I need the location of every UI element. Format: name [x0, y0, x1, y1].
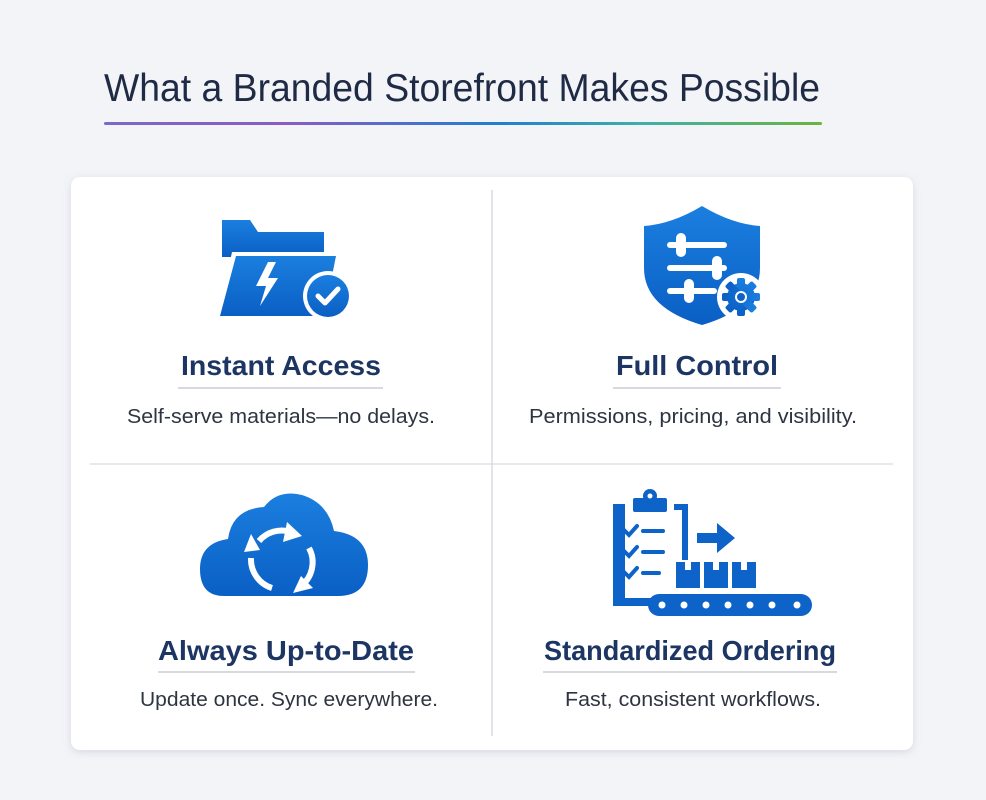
panel: full control: Permissions, pricing, and visibility.: [529, 406, 857, 428]
icon: shield with sliders and gear: [644, 206, 765, 325]
panel: always up-to-date: [140, 494, 438, 711]
heading: Instant Access: [181, 350, 381, 381]
text block: Self-serve materials—no delays.: [127, 406, 435, 428]
panel: instant access: [127, 220, 435, 428]
title: What a Branded Storefront Makes Possible: [104, 67, 820, 110]
panel: card: [71, 177, 913, 750]
icon: clipboard and conveyor: [613, 489, 812, 616]
panel: standardized ordering: Fast, consistent workflows.: [565, 689, 821, 711]
panel: full control: Full Control: [616, 350, 778, 381]
panel: full control: [529, 206, 857, 428]
panel: standardized ordering: [543, 489, 837, 711]
icon: cloud sync: [200, 494, 368, 596]
icon: folder with bolt and check: [218, 220, 353, 321]
panel: standardized ordering: Standardized Ordering: [544, 635, 836, 666]
panel: always up-to-date: Always Up-to-Date: [158, 635, 414, 666]
panel: always up-to-date: Update once. Sync everywhere.: [140, 689, 438, 711]
